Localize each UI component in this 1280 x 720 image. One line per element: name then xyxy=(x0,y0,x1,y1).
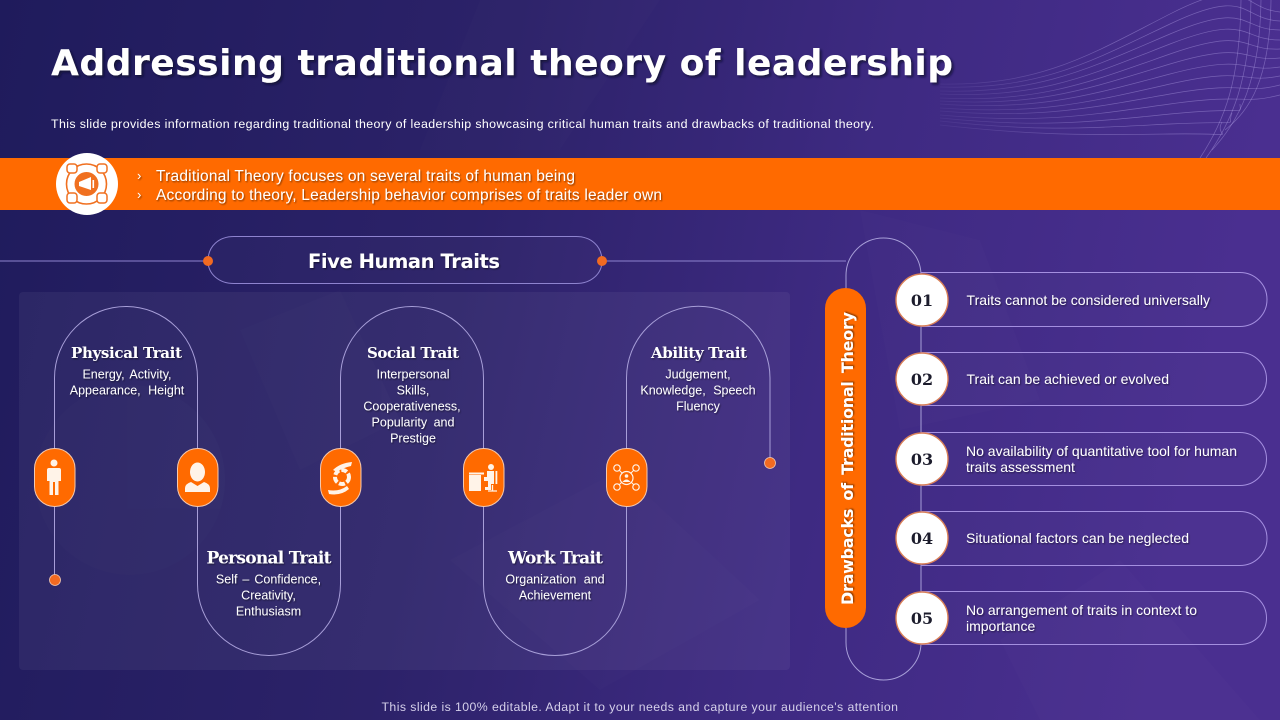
icon: megaphone network xyxy=(56,153,118,215)
drawback 02: Trait can be achieved or evolved xyxy=(966,371,1169,387)
trait: Ability Trait: Judgement, xyxy=(665,368,731,382)
heading: Five Human Traits: Five Human Traits xyxy=(308,250,500,273)
trait: Personal Trait: Self – Confidence, xyxy=(216,572,321,586)
drawback 04: 04 xyxy=(911,529,933,548)
drawback 03: No availability of quantitative tool for human xyxy=(966,443,1237,459)
serpentine connector line xyxy=(54,306,770,656)
drawback 05: importance xyxy=(966,618,1035,634)
vertical label: Drawbacks of Traditional Theory: Drawbacks of Traditional Theory xyxy=(838,311,857,605)
drawback 02: 02 xyxy=(911,370,933,389)
drawbacks connector line xyxy=(846,238,921,680)
trait: Physical Trait: Energy, Activity, xyxy=(82,368,172,382)
trait: Social Trait: Prestige xyxy=(390,432,436,446)
drawback 03: 03 xyxy=(911,450,933,469)
orange banner xyxy=(0,153,1280,215)
trait: Personal Trait xyxy=(206,548,332,618)
trait: Physical Trait xyxy=(70,344,185,398)
trait: Ability Trait: Ability Trait xyxy=(650,344,747,362)
drawback 05 xyxy=(896,592,1266,644)
trait: Social Trait: Popularity and xyxy=(372,416,455,430)
trait: Work Trait: Achievement xyxy=(519,588,592,602)
subtitle description: This slide provides information regarding traditional theory of leadership showcasing critical human traits and drawbacks of traditional theory. xyxy=(51,117,874,131)
drawback 03: traits assessment xyxy=(966,459,1075,475)
trait: Social Trait: Skills, xyxy=(397,384,429,398)
trait: Personal Trait: Creativity, xyxy=(241,588,296,602)
icon: user bust xyxy=(178,448,218,506)
drawback 05: 05 xyxy=(911,609,933,628)
heading: Five Human Traits xyxy=(0,236,846,284)
trait: Ability Trait: Fluency xyxy=(676,400,721,414)
icon: person standing xyxy=(34,448,75,506)
icon: people network xyxy=(606,448,647,506)
trait: Work Trait: Organization and xyxy=(505,572,605,586)
trait: Ability Trait xyxy=(640,344,756,414)
banner bullet points: › xyxy=(137,187,141,202)
trait: Social Trait: Cooperativeness, xyxy=(363,400,461,414)
trait: Social Trait: Social Trait xyxy=(367,344,459,362)
banner bullet points: › xyxy=(137,168,141,183)
drawback 01 xyxy=(896,272,1267,326)
trait: Personal Trait: Personal Trait xyxy=(206,548,332,568)
drawback 02 xyxy=(896,352,1266,406)
trait: Physical Trait: Appearance, Height xyxy=(70,384,185,398)
traits panel background xyxy=(19,292,790,670)
drawback 04: Situational factors can be neglected xyxy=(966,530,1189,546)
trait: Work Trait xyxy=(505,548,605,602)
trait: Work Trait: Work Trait xyxy=(507,548,603,568)
drawback 04 xyxy=(896,512,1267,566)
drawback 03 xyxy=(896,432,1266,486)
drawback 05: No arrangement of traits in context to xyxy=(966,602,1197,618)
banner bullet points: According to theory, Leadership behavior comprises of traits leader own xyxy=(156,187,662,204)
end marker: finish dot xyxy=(764,458,776,468)
banner bullet points: Traditional Theory focuses on several traits of human being xyxy=(156,168,575,185)
trait: Social Trait xyxy=(363,344,461,446)
banner bullet points xyxy=(137,168,662,204)
drawback 01: 01 xyxy=(911,291,933,310)
trait: Physical Trait: Physical Trait xyxy=(71,344,182,362)
vertical label: Drawbacks of Traditional Theory xyxy=(825,288,866,628)
drawback 01: Traits cannot be considered universally xyxy=(966,292,1210,308)
end marker: start dot xyxy=(50,574,60,586)
decorative wave mesh xyxy=(940,0,1280,158)
icon: hands holding globe xyxy=(320,448,361,506)
icon: person at desk xyxy=(464,448,504,506)
trait: Social Trait: Interpersonal xyxy=(377,368,449,382)
footer note: This slide is 100% editable. Adapt it to your needs and capture your audience's attention xyxy=(382,700,898,714)
title: Addressing traditional theory of leadership xyxy=(51,43,953,84)
trait: Personal Trait: Enthusiasm xyxy=(236,604,301,618)
trait: Ability Trait: Knowledge, Speech xyxy=(640,384,756,398)
